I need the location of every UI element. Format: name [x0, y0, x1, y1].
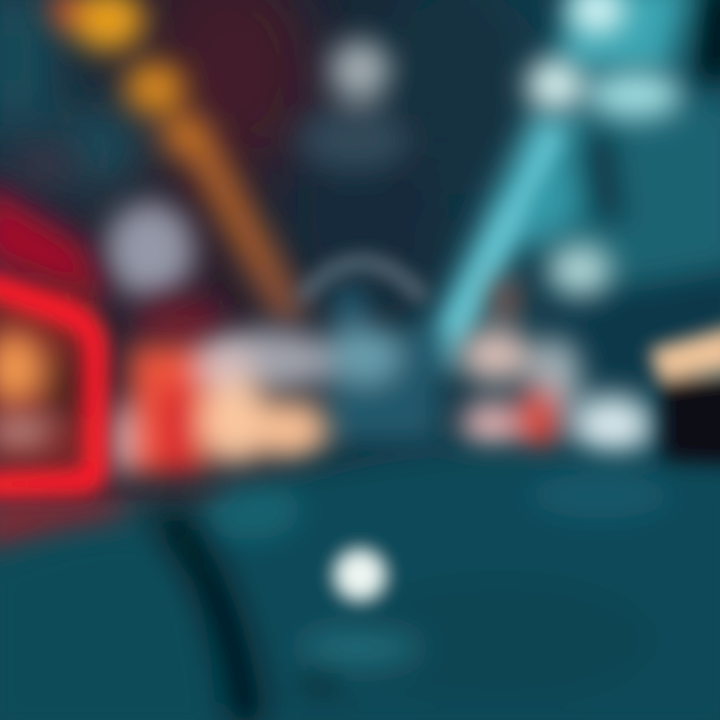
red neon frame: [0, 282, 95, 485]
right teal mass: [530, 0, 720, 400]
upper left haze: [0, 0, 530, 320]
bottom teal car body: [190, 450, 720, 720]
red haze under frame: [0, 480, 240, 555]
white glow light lower: [334, 549, 386, 601]
red and orange shop lights: [108, 345, 328, 476]
grey sign at left: [15, 149, 194, 298]
red awning: [0, 180, 225, 342]
right shop lights: [459, 278, 652, 455]
orange street lights: [50, 0, 308, 325]
dark block and cream band at right: [650, 326, 720, 468]
grey arch: [300, 262, 425, 300]
bottom left teal panel: [0, 527, 215, 720]
white glow lights upper: [300, 0, 683, 296]
teal light beam: [418, 110, 580, 370]
central street glow: [205, 286, 440, 445]
background sky: [0, 0, 720, 502]
dark curved seam: [165, 515, 248, 720]
faint lower mark: [300, 630, 420, 694]
